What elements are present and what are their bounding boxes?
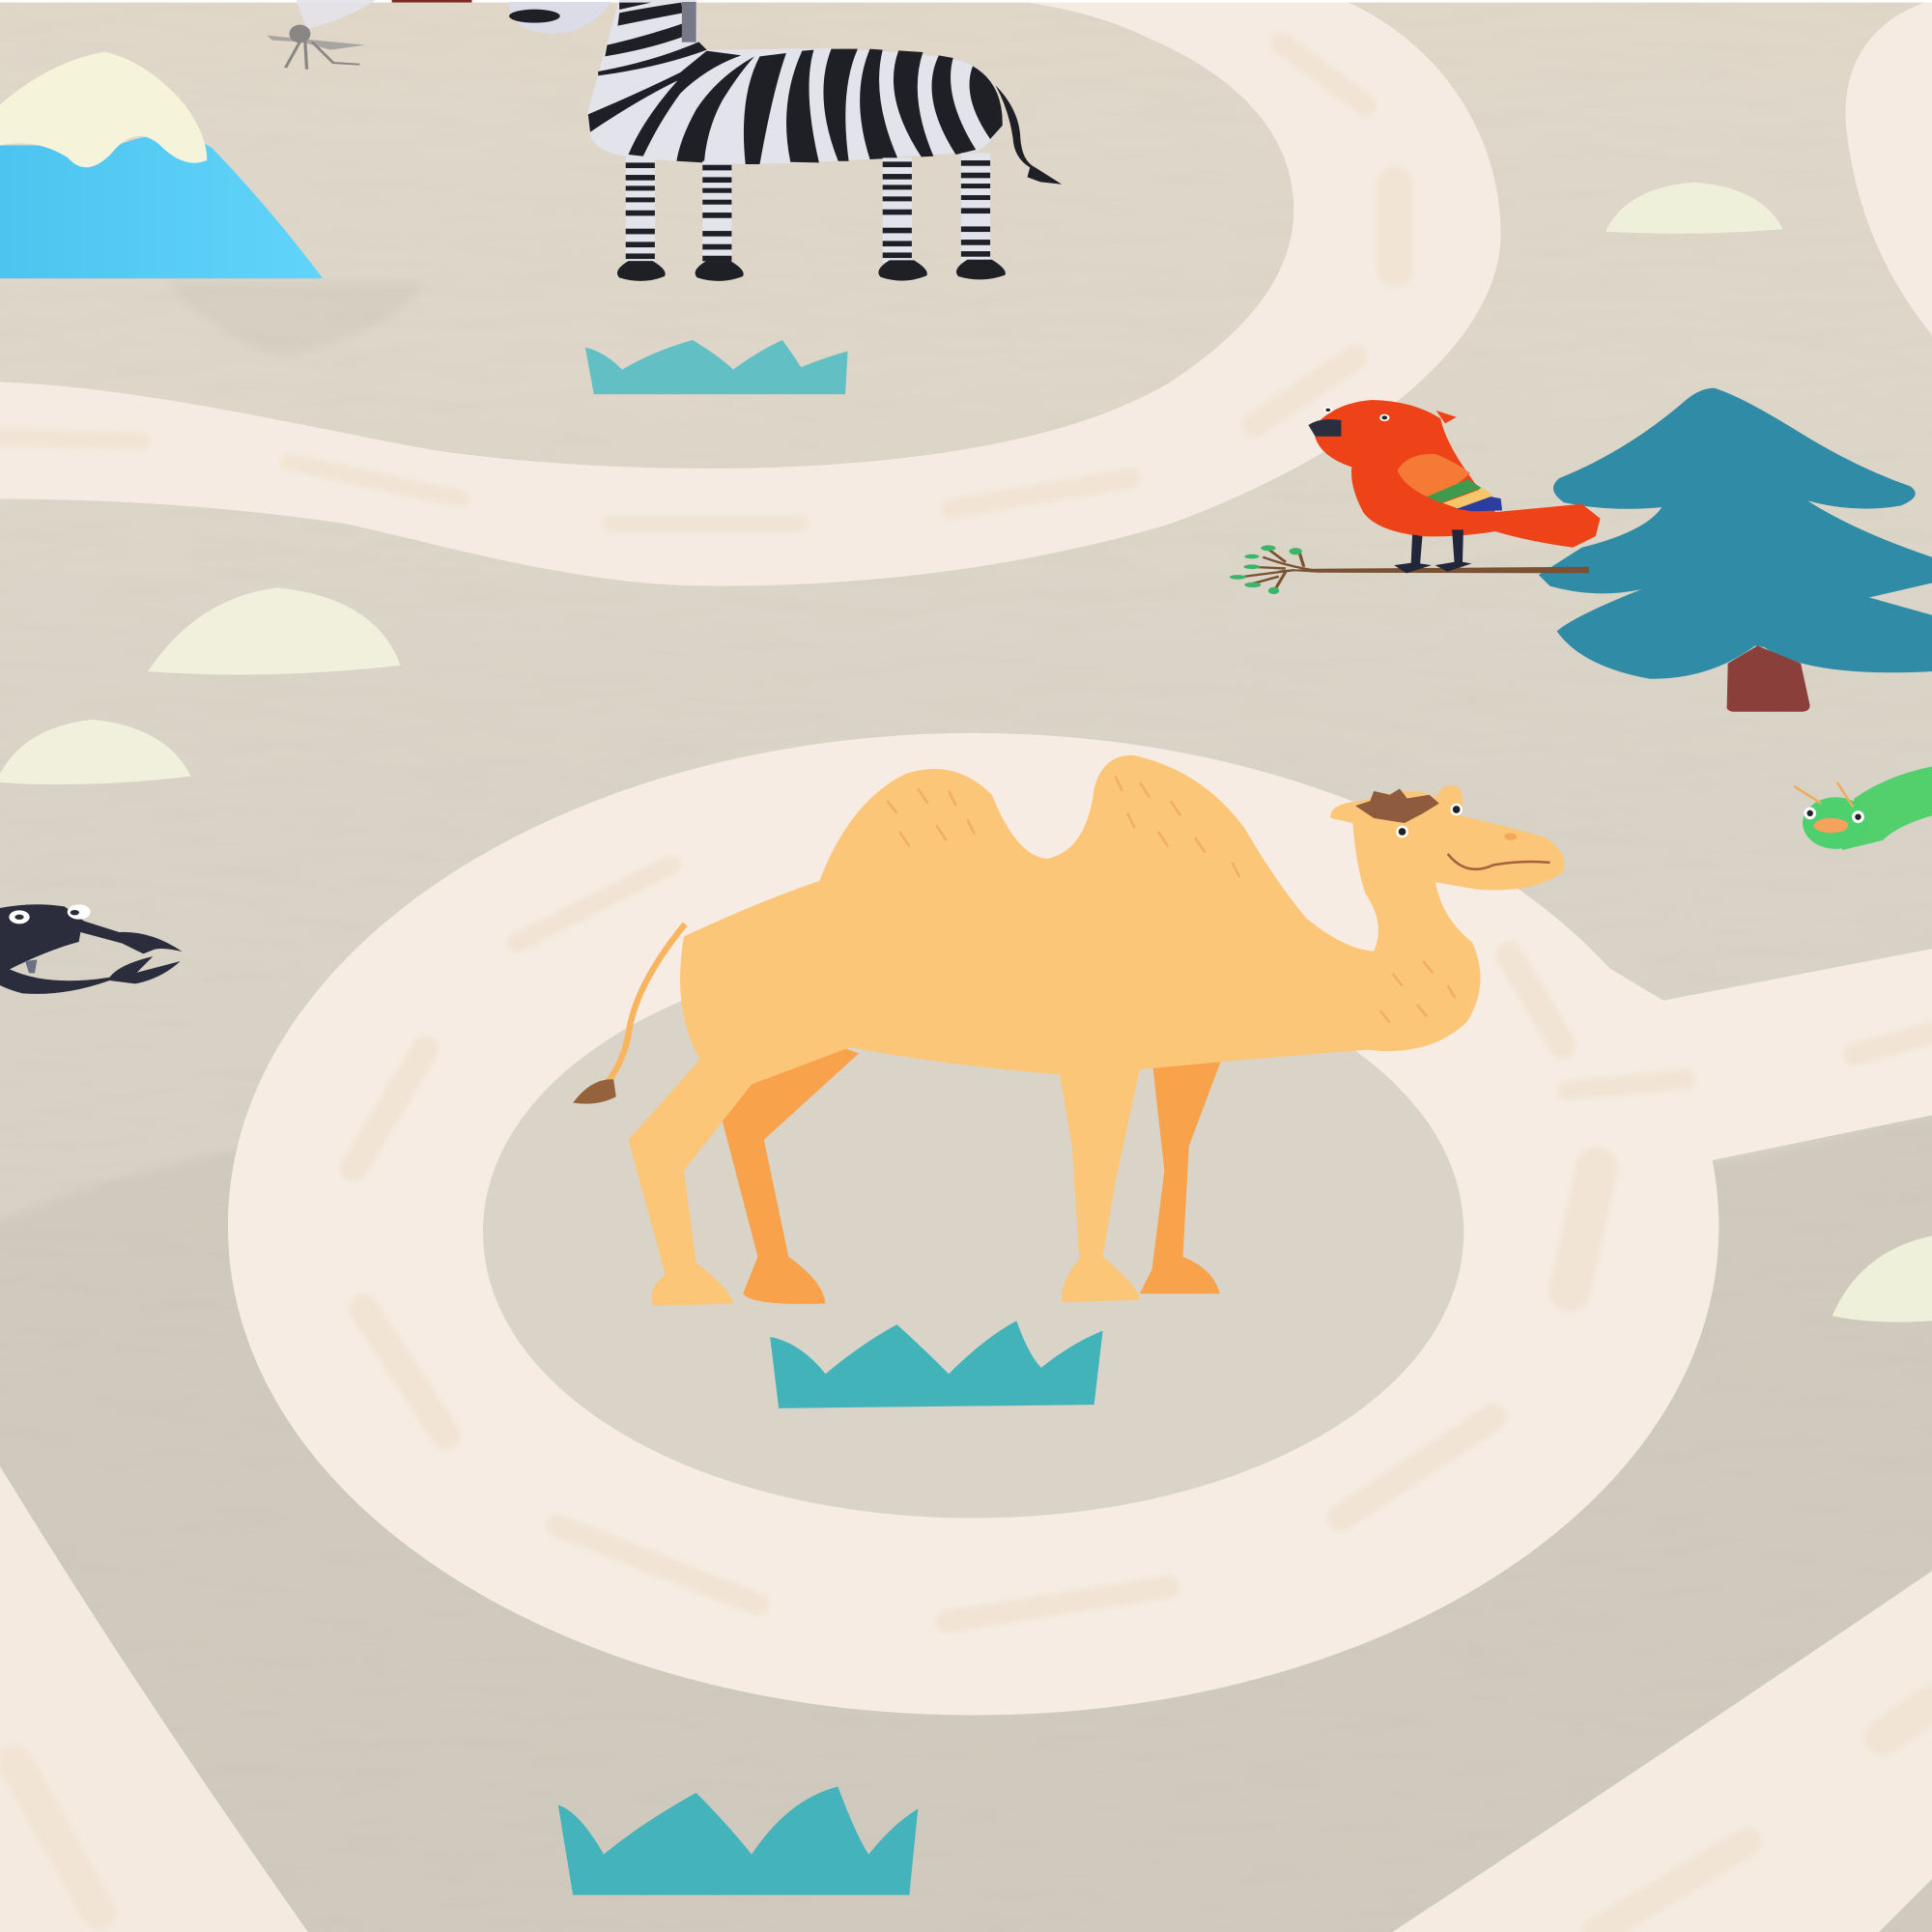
parrot body <box>1316 400 1601 548</box>
top edge strip <box>0 0 1932 3</box>
icon: hill top right <box>1605 183 1783 234</box>
icon: mosquito <box>267 0 376 70</box>
parrot beak and eye <box>1308 407 1389 437</box>
branch <box>1230 545 1589 594</box>
icon: camel <box>573 755 1565 1306</box>
camel tail <box>573 924 685 1104</box>
camel face <box>1396 804 1550 869</box>
darker ground region <box>0 1096 1932 1932</box>
bottom left road <box>0 1466 308 1932</box>
icon: hill far left <box>0 720 191 784</box>
icon: grass top <box>585 340 848 394</box>
icon: scorpion <box>0 904 182 994</box>
mountain shadow <box>166 281 425 357</box>
icon: mountain <box>0 52 323 278</box>
icon: hill right <box>1833 1236 1932 1321</box>
icon: hill left <box>148 587 401 674</box>
icon: caterpillar <box>1794 766 1932 850</box>
inner circle ground <box>480 944 1466 1520</box>
right branch road <box>1577 949 1932 1161</box>
parrot legs <box>1394 529 1471 573</box>
icon: grass bottom <box>558 1786 918 1895</box>
camel mane <box>1355 788 1439 823</box>
ring road <box>228 733 1719 1716</box>
bottom right road <box>1392 1571 1932 1932</box>
zebra head <box>509 2 611 34</box>
parrot wing <box>1397 454 1502 511</box>
icon: grass centre <box>770 1321 1103 1408</box>
zebra legs <box>617 153 1006 281</box>
camel far legs <box>721 1033 1222 1304</box>
top right road <box>1845 0 1932 335</box>
camel fur stipple <box>887 777 1455 1023</box>
icon: parrot on branch <box>1230 400 1601 594</box>
camel body <box>629 755 1565 1306</box>
top winding road <box>0 0 1501 586</box>
icon: zebra <box>509 0 1062 281</box>
icon: tree <box>1539 388 1932 712</box>
